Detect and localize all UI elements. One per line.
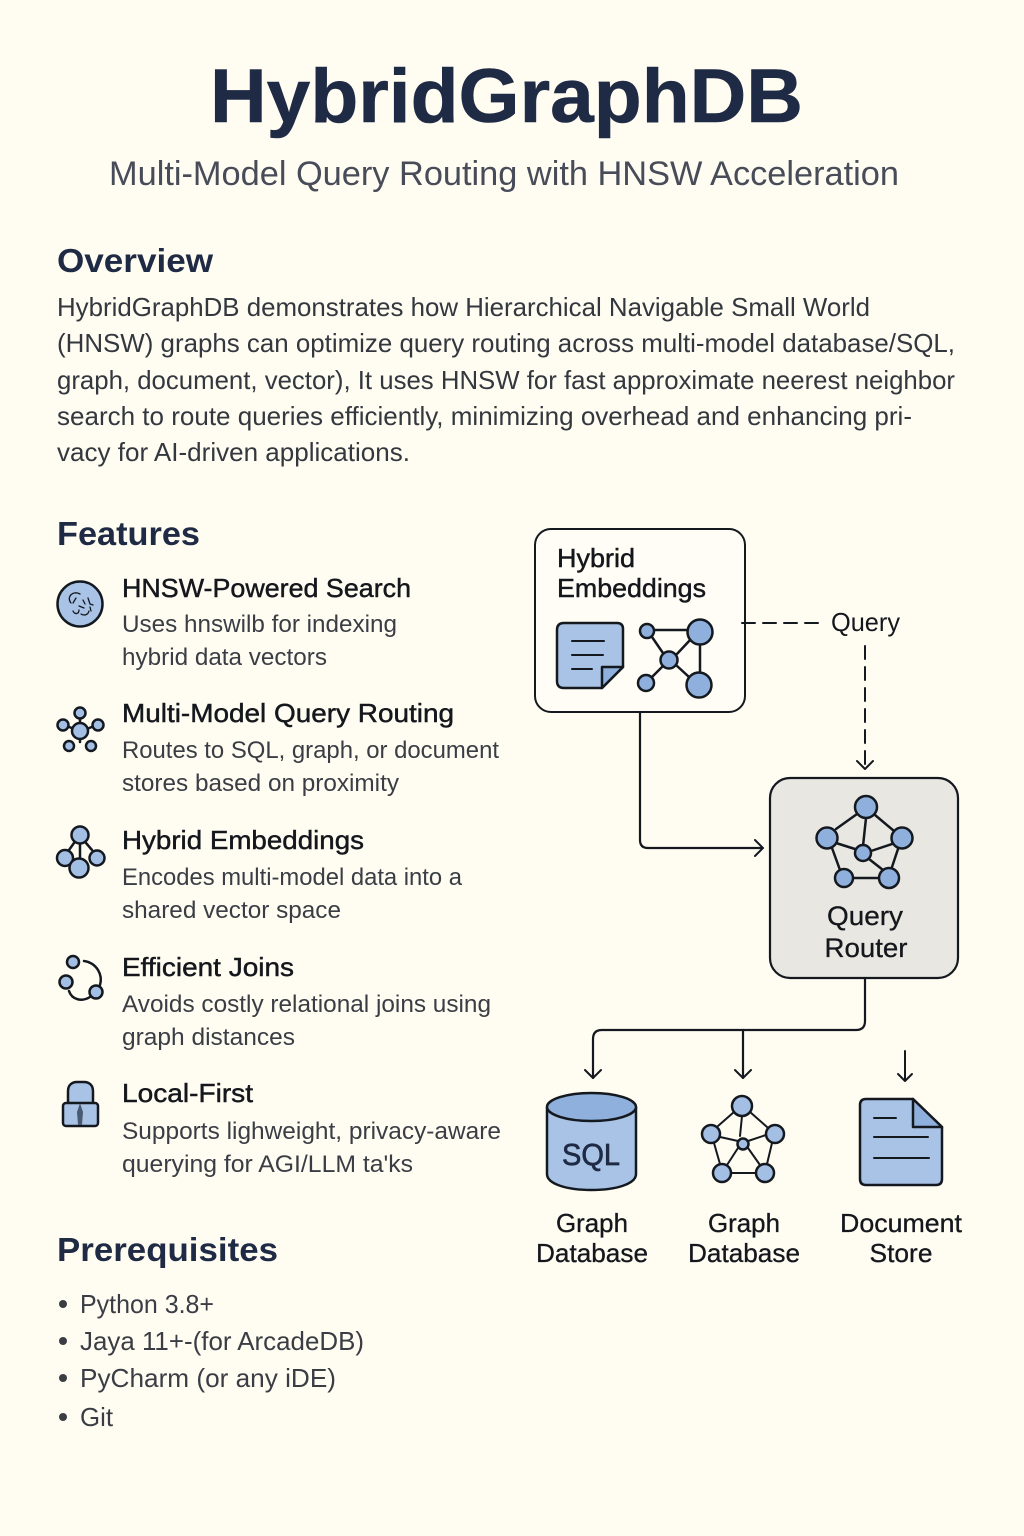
feature: Hybrid Embeddings	[57, 825, 463, 924]
store label: document store	[840, 1208, 963, 1268]
feature: Local-First	[63, 1078, 501, 1178]
feature title: Local-First	[122, 1078, 254, 1108]
heading: features: Features	[57, 515, 200, 552]
heading: prerequisites: Prerequisites	[57, 1231, 278, 1268]
store label: graph database 2	[688, 1208, 800, 1268]
feature: HNSW-Powered Search	[58, 573, 411, 671]
feature description	[122, 1118, 501, 1178]
prerequisites list: Git	[80, 1402, 114, 1432]
store label: document store: Store	[870, 1238, 932, 1268]
panel heading	[557, 543, 706, 603]
feature description	[122, 864, 463, 924]
overview text block: (HNSW) graphs can optimize query routing across multi-model database/SQL,	[57, 328, 955, 358]
routing arrows to stores	[585, 978, 912, 1081]
prerequisites list: PyCharm (or any iDE)	[80, 1363, 336, 1393]
feature description: shared vector space	[122, 897, 341, 924]
feature description	[122, 991, 491, 1051]
feature title: Hybrid Embeddings	[122, 825, 364, 855]
feature description	[122, 737, 499, 797]
subtitle: Multi-Model Query Routing with HNSW Acceleration	[109, 155, 899, 193]
overview text block: vacy for AI-driven applications.	[57, 437, 410, 467]
icon: padlock	[63, 1082, 98, 1126]
feature: Efficient Joins	[60, 952, 491, 1051]
feature description: graph distances	[122, 1024, 295, 1051]
store: document icon	[860, 1099, 942, 1185]
store label: graph database 2: Graph	[708, 1208, 780, 1238]
feature description: hybrid data vectors	[122, 644, 327, 671]
feature description: stores based on proximity	[122, 770, 399, 797]
dashed arrow: query to router	[857, 646, 873, 769]
feature title: Multi-Model Query Routing	[122, 698, 454, 728]
icon: search index circle	[58, 582, 102, 626]
overview text block: HybridGraphDB demonstrates how Hierarchical Navigable Small World	[57, 292, 870, 322]
feature description	[122, 611, 397, 671]
feature description: Avoids costly relational joins using	[122, 991, 491, 1018]
overview text block	[57, 292, 955, 467]
prerequisites list: Python 3.8+	[80, 1289, 214, 1319]
store: graph icon	[702, 1096, 784, 1182]
store label: graph database 1	[536, 1208, 648, 1268]
store: SQL cylinder	[547, 1093, 636, 1190]
overview text block: search to route queries efficiently, minimizing overhead and enhancing pri-	[57, 401, 912, 431]
icon: embedding graph	[638, 620, 712, 698]
panel heading: Embeddings	[557, 573, 706, 603]
icon: joined nodes	[60, 956, 102, 1000]
store label: graph database 1: Database	[536, 1238, 648, 1268]
dashed arrow: embeddings to query	[742, 622, 820, 624]
panel: hybrid embeddings	[535, 529, 745, 712]
feature title: HNSW-Powered Search	[122, 573, 411, 603]
prerequisites list: Jaya 11+-(for ArcadeDB)	[80, 1326, 364, 1356]
panel label: Router	[824, 933, 908, 963]
feature description: Routes to SQL, graph, or document	[122, 737, 499, 764]
icon: router graph	[816, 796, 912, 888]
SQL label: SQL	[562, 1137, 620, 1172]
icon: note document	[557, 623, 623, 688]
store label: graph database 1: Graph	[556, 1208, 628, 1238]
feature description: Encodes multi-model data into a	[122, 864, 463, 891]
feature title: Efficient Joins	[122, 952, 294, 982]
heading: overview: Overview	[57, 242, 213, 279]
panel heading: Hybrid	[557, 543, 635, 573]
feature description: querying for AGI/LLM ta'ks	[122, 1151, 413, 1178]
store label: graph database 2: Database	[688, 1238, 800, 1268]
query label: Query	[831, 607, 900, 637]
icon: hub nodes	[58, 708, 104, 751]
arrow: embeddings to router	[640, 712, 763, 856]
panel: query router	[770, 778, 958, 978]
panel label: Query	[827, 901, 904, 931]
panel label	[824, 901, 908, 963]
title: HybridGraphDB	[210, 54, 803, 139]
prerequisites list	[59, 1289, 364, 1432]
store label: document store: Document	[840, 1208, 963, 1238]
feature description: Supports lighweight, privacy-aware	[122, 1118, 501, 1145]
icon: embedding cluster	[57, 826, 104, 878]
feature: Multi-Model Query Routing	[58, 698, 499, 797]
feature description: Uses hnswilb for indexing	[122, 611, 397, 638]
overview text block: graph, document, vector), It uses HNSW for fast approximate neerest neighbor	[57, 365, 955, 395]
